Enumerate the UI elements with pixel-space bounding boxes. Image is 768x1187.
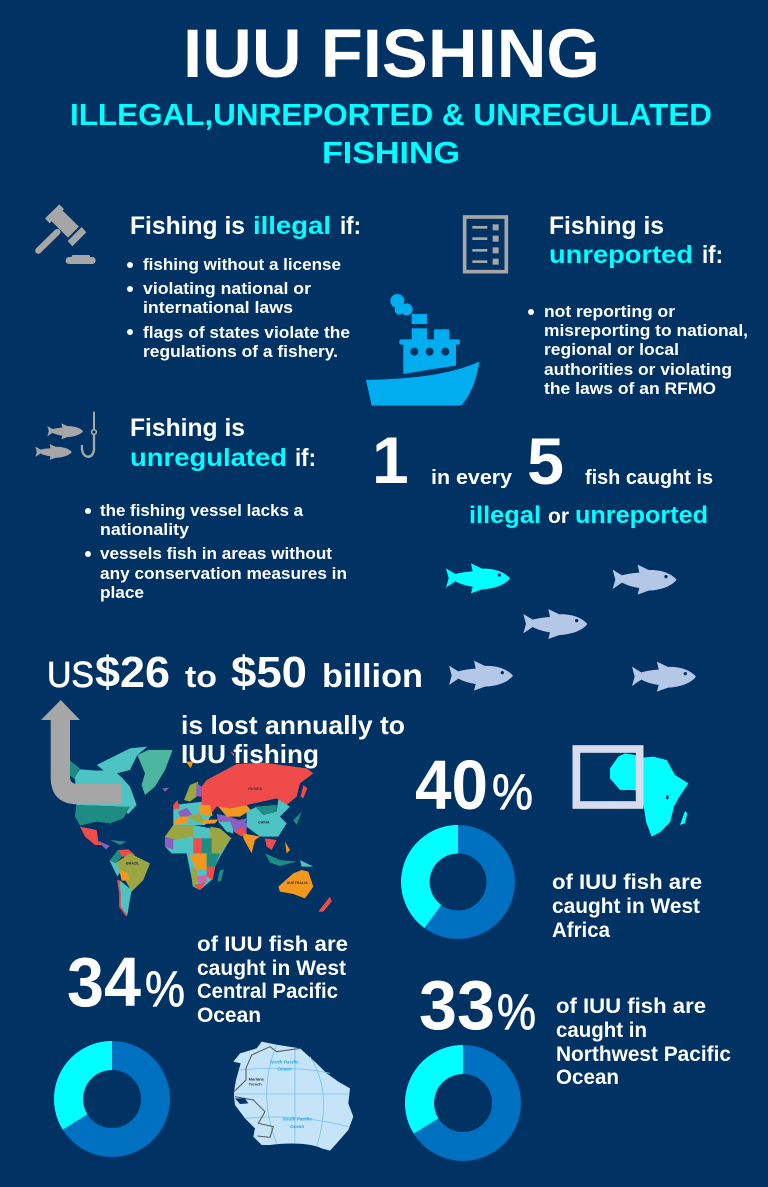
list: illegal criteria: fishing without a license [143, 255, 341, 274]
world map: CHINA [258, 821, 270, 825]
heading: illegal: if: [340, 212, 361, 240]
icon: Pacific Ocean map: North Pacific [270, 1059, 299, 1064]
arrow [41, 700, 121, 804]
list: unregulated criteria: place [100, 583, 144, 602]
world map: BRAZIL [126, 861, 140, 865]
list: illegal criteria: flags of states violate the [143, 323, 350, 342]
icon: Pacific Ocean map: South Pacific [282, 1117, 312, 1122]
percentage: 40%: % [492, 764, 533, 820]
heading: illegal: Fishing is [130, 212, 245, 240]
icon: gavel [38, 204, 96, 264]
list: unregulated criteria: vessels fish in areas without [100, 544, 332, 563]
text: Northwest Pacific: Northwest Pacific [556, 1043, 731, 1066]
panel: West Africa [415, 746, 702, 942]
list: unreported criteria: misreporting to national, [544, 321, 748, 340]
list: unreported criteria: authorities or violating [544, 360, 732, 379]
text: West Africa [552, 871, 702, 942]
list: unreported criteria: regional or local [544, 340, 679, 359]
text: Northwest Pacific: Ocean [556, 1066, 619, 1089]
text: West Africa: caught in West [552, 895, 700, 918]
icon: Pacific Ocean map: Trench [249, 1081, 262, 1086]
text: West Central Pacific: caught in West [197, 957, 346, 980]
percentage: 33%: % [497, 984, 536, 1040]
text: Northwest Pacific [556, 995, 731, 1089]
text: Northwest Pacific: of IUU fish are [556, 995, 706, 1018]
statistic: billions lost: US [47, 654, 94, 695]
statistic: 1 in every 5: 1 [372, 423, 409, 497]
panel: unreported [528, 212, 748, 398]
heading: unreported: if: [702, 241, 723, 269]
icon: ship [366, 294, 479, 406]
heading: unreported: unreported [549, 241, 693, 269]
icon: Pacific Ocean map [233, 1042, 353, 1151]
statistic: 1 in every 5: unreported [575, 502, 708, 529]
heading: unreported [549, 212, 723, 269]
statistic: 1 in every 5: or [548, 505, 569, 528]
text: West Central Pacific: Ocean [197, 1004, 261, 1027]
heading: unregulated [130, 414, 316, 472]
donut chart: 34% [68, 1056, 156, 1142]
icon: fish and hook [35, 412, 96, 460]
list: unregulated criteria: any conservation measures in [100, 564, 347, 583]
percentage: 33%: 33 [419, 966, 495, 1044]
statistic: billions lost: to [185, 659, 217, 694]
list: unregulated criteria: nationality [100, 520, 190, 539]
statistic: billions lost: billion [322, 657, 423, 694]
statistic: 1 in every 5: fish caught is [585, 467, 713, 489]
icon row: five fish [446, 563, 696, 692]
icon: report document [465, 217, 506, 272]
statistic: 1 in every 5: 5 [527, 424, 564, 498]
statistic: billions lost: $26 [95, 648, 170, 697]
heading: unreported: Fishing is [549, 212, 664, 240]
subtitle [70, 97, 712, 170]
text: West Central Pacific [197, 933, 348, 1027]
list: illegal criteria: international laws [143, 298, 293, 317]
percentage: 34% [67, 943, 185, 1021]
list: unregulated criteria [85, 501, 347, 602]
statistic: 1 in every 5 [372, 423, 713, 529]
panel: unregulated [85, 414, 347, 602]
statistic: billions lost: $50 [231, 648, 307, 697]
heading: unregulated: unregulated [130, 444, 287, 472]
icon: Africa map with frame [576, 749, 688, 837]
list: unreported criteria [528, 302, 748, 398]
world map [69, 747, 332, 916]
icon: Pacific Ocean map: Ocean [290, 1124, 304, 1129]
icon: Pacific Ocean map: Mariana [249, 1077, 265, 1082]
percentage: 34%: 34 [67, 943, 141, 1021]
heading: illegal [130, 212, 361, 240]
text: West Africa: of IUU fish are [552, 871, 702, 894]
icon: Pacific Ocean map: Ocean [277, 1067, 292, 1072]
list: unreported criteria: the laws of an RFMO [544, 379, 716, 398]
subtitle: FISHING [322, 135, 460, 170]
statistic: billions lost: IUU fishing [181, 739, 319, 769]
text: West Africa: Africa [552, 919, 610, 942]
text: West Central Pacific: of IUU fish are [197, 933, 348, 956]
statistic: 1 in every 5: in every [431, 467, 513, 489]
text: West Central Pacific: Central Pacific [197, 980, 338, 1003]
statistic: billions lost: is lost annually to [181, 710, 405, 740]
list: unregulated criteria: the fishing vessel lacks a [100, 501, 304, 520]
world map: RUSSIA [248, 787, 262, 791]
heading: unregulated: Fishing is [130, 414, 245, 442]
percentage: 40% [415, 746, 533, 824]
percentage: 33% [419, 966, 536, 1044]
text: Northwest Pacific: caught in [556, 1019, 647, 1042]
statistic: billions lost [47, 648, 423, 769]
subtitle: ILLEGAL,UNREPORTED & UNREGULATED [70, 97, 712, 132]
list: unreported criteria: not reporting or [544, 302, 675, 321]
percentage: 40%: 40 [415, 746, 488, 824]
donut chart: 40% [415, 839, 501, 925]
world map: AUSTRALIA [287, 881, 308, 885]
donut chart: 33% [420, 1060, 506, 1146]
list: illegal criteria [127, 255, 350, 361]
panel: West Central Pacific [67, 933, 353, 1151]
panel: illegal [127, 212, 361, 361]
statistic: 1 in every 5: illegal [469, 502, 541, 529]
heading: unregulated: if: [295, 444, 316, 472]
list: illegal criteria: violating national or [143, 279, 311, 298]
heading: illegal: illegal [253, 212, 331, 240]
panel: Northwest Pacific [419, 966, 731, 1146]
percentage: 34%: % [145, 961, 185, 1017]
title: IUU FISHING [183, 15, 600, 92]
list: illegal criteria: regulations of a fishery. [143, 342, 338, 361]
